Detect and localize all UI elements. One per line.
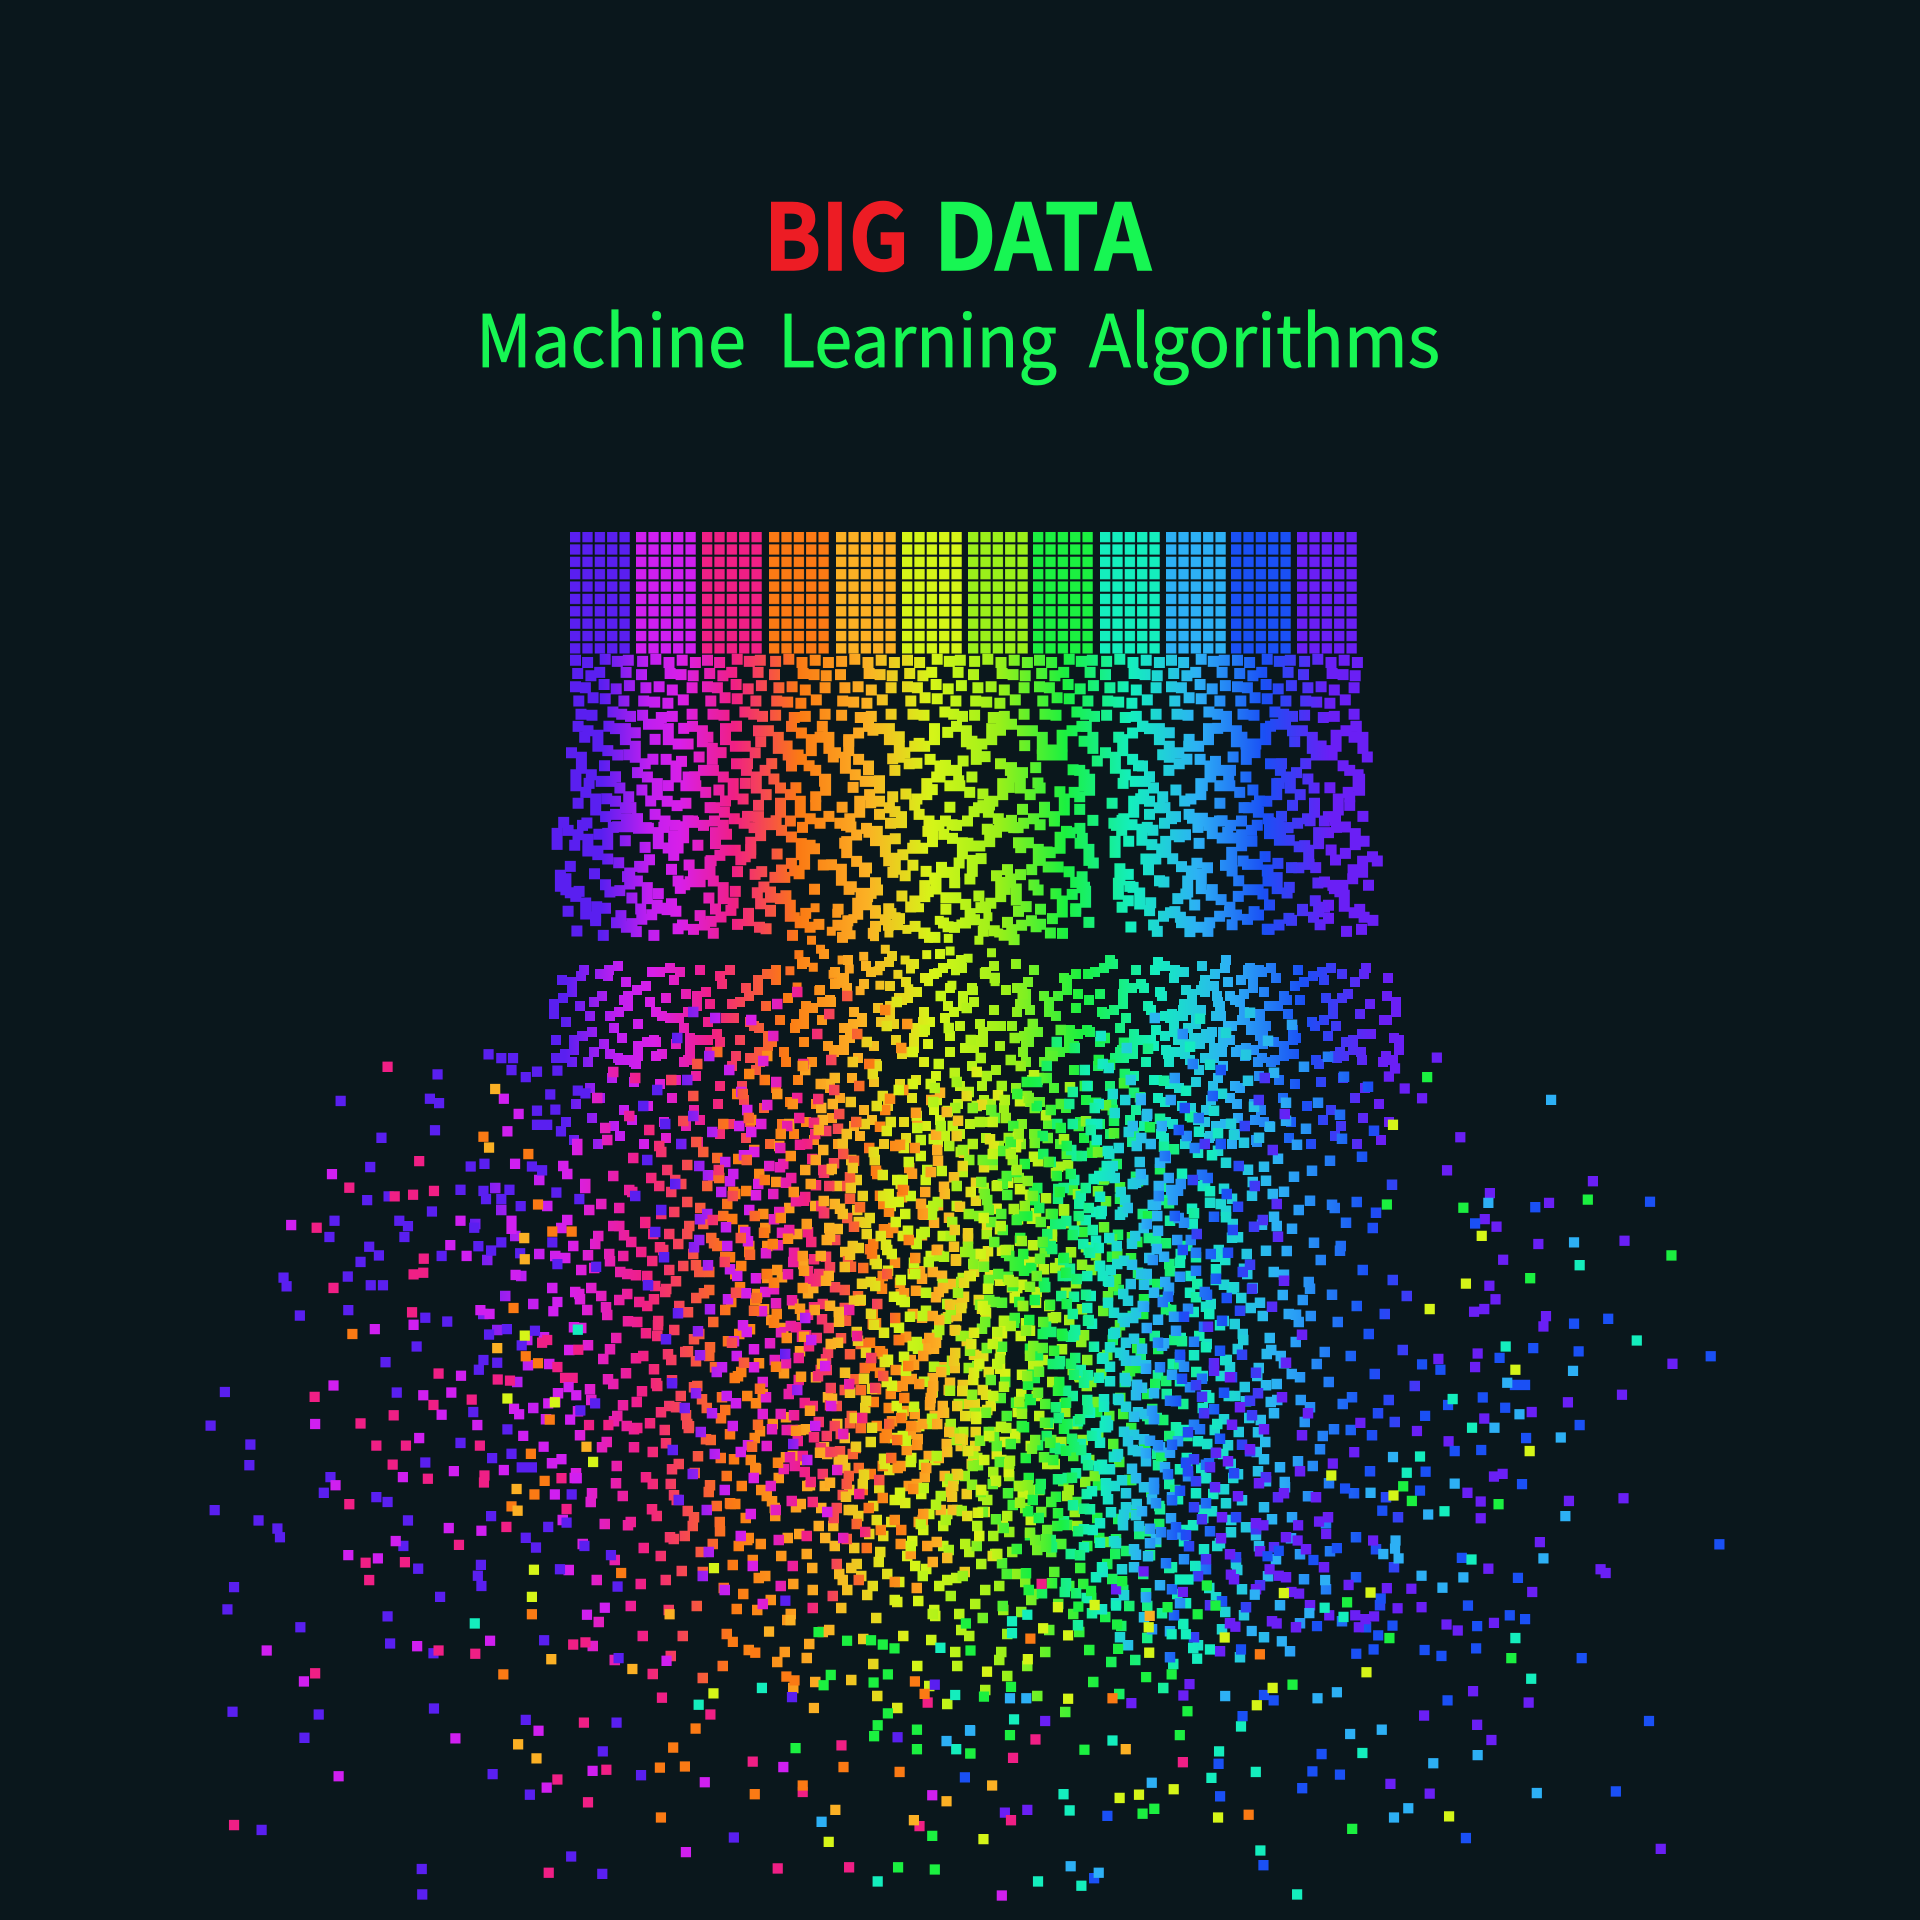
particles: lower cloud, cool mix layer	[708, 1012, 1308, 1642]
particles: middle band	[549, 949, 1404, 1149]
chart: rainbow data grid columns	[570, 532, 1357, 654]
particles: lower cloud, wide spread layer	[470, 972, 1420, 1718]
particles: scattered outer squares, right side	[965, 1058, 1724, 1896]
title: BIG DATA: BIG	[764, 165, 909, 297]
subtitle: Machine Learning Algorithms: Learning	[778, 283, 1057, 388]
title: BIG DATA: DATA	[934, 165, 1152, 297]
title: BIG DATA	[764, 165, 1152, 297]
particles: upper stream falling from the grid	[552, 654, 1383, 996]
subtitle: Machine Learning Algorithms	[476, 283, 1440, 388]
particles: lower cloud, warm mix layer	[630, 986, 1282, 1614]
subtitle: Machine Learning Algorithms: Algorithms	[1089, 283, 1440, 388]
subtitle: Machine Learning Algorithms: Machine	[476, 283, 746, 388]
particles: scattered outer squares, left side	[206, 1054, 976, 1894]
particles: lower cloud, chaotic narrow mix layer	[780, 1042, 1334, 1662]
